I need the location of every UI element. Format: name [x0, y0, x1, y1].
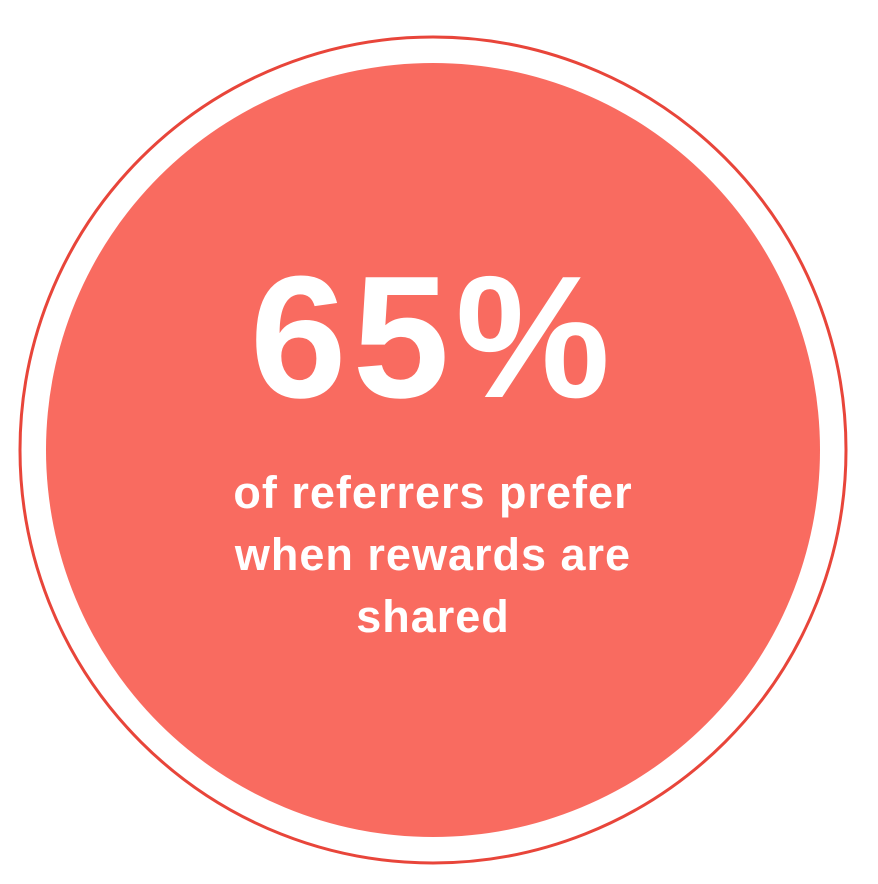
description text: of referrers prefer — [233, 467, 633, 518]
description text — [233, 467, 633, 642]
headline stat: 65% — [250, 239, 616, 434]
description text: when rewards are — [235, 529, 631, 580]
description text: shared — [356, 591, 510, 642]
